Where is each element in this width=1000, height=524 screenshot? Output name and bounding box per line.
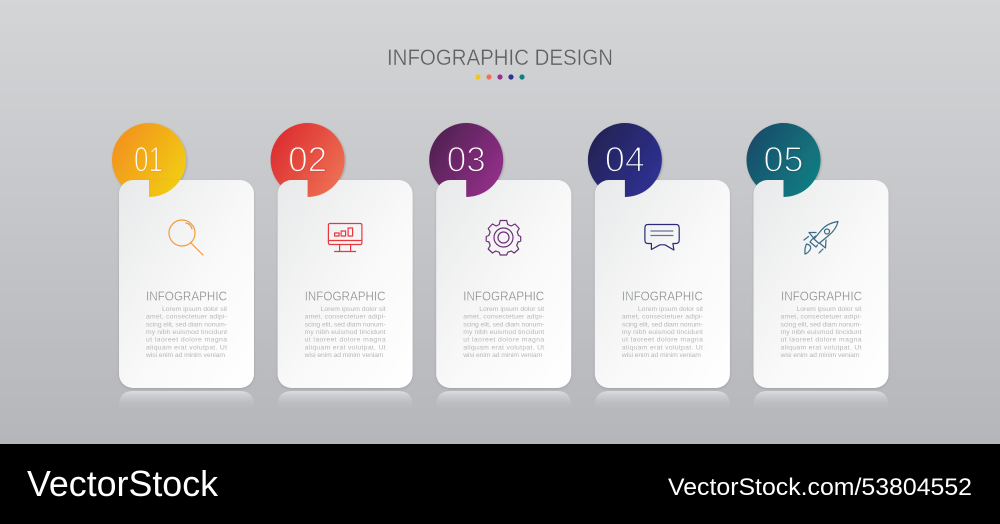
body text: wisi enim ad minim veniam	[621, 352, 701, 359]
icon: rocket	[804, 222, 838, 254]
body text: scing elit, sed diam nonum-	[146, 322, 227, 328]
body text: aliquam erat volutpat. Ut	[305, 344, 386, 352]
heading: INFOGRAPHIC	[146, 290, 227, 304]
icon: monitor	[328, 224, 362, 252]
body text: wisi enim ad minim veniam	[780, 352, 860, 359]
circle notch	[784, 180, 815, 197]
body text	[462, 306, 544, 359]
number circle	[429, 123, 503, 197]
body text: scing elit, sed diam nonum-	[463, 322, 544, 328]
body text: aliquam erat volutpat. Ut	[146, 344, 227, 352]
body text: ut laoreet dolore magna	[146, 336, 227, 344]
circle notch	[624, 180, 656, 197]
body text: my nibh euismod tincidunt	[780, 329, 862, 336]
body text	[304, 306, 386, 359]
heading: INFOGRAPHIC	[305, 290, 386, 304]
circle notch	[149, 180, 180, 197]
card	[119, 180, 254, 388]
number: 03	[447, 140, 486, 179]
body text: amet, consectetuer adipi-	[463, 314, 544, 320]
panel: step 02	[271, 123, 413, 410]
number: 01	[134, 140, 163, 179]
panel: step 05	[746, 123, 888, 410]
card	[436, 180, 571, 388]
body text: Lorem ipsum dolor sit	[638, 306, 703, 313]
number: 05	[764, 140, 804, 179]
circle notch	[308, 180, 339, 197]
panel: step 01	[112, 123, 254, 410]
body text	[780, 306, 862, 359]
body text: my nibh euismod tincidunt	[622, 329, 703, 336]
body text	[621, 306, 703, 359]
body text: Lorem ipsum dolor sit	[321, 306, 386, 313]
card	[278, 180, 413, 388]
reflection	[436, 391, 571, 410]
title dots	[475, 74, 525, 80]
heading: INFOGRAPHIC	[781, 290, 862, 304]
number circle	[746, 123, 820, 197]
panel: step 04	[588, 123, 730, 410]
body text: wisi enim ad minim veniam	[304, 352, 384, 359]
card	[754, 180, 888, 388]
body text: ut laoreet dolore magna	[622, 336, 703, 344]
body text: amet, consectetuer adipi-	[622, 314, 703, 320]
body text: Lorem ipsum dolor sit	[796, 306, 862, 313]
card	[595, 180, 730, 388]
number: 02	[288, 140, 327, 179]
icon: chat bubble	[645, 224, 679, 250]
reflection	[595, 391, 730, 410]
title: INFOGRAPHIC DESIGN	[387, 45, 613, 70]
footer image id: VectorStock.com/53804552	[668, 474, 972, 501]
body text: wisi enim ad minim veniam	[145, 352, 225, 359]
body text: amet, consectetuer adipi-	[305, 314, 386, 320]
body text: aliquam erat volutpat. Ut	[780, 344, 862, 352]
number circle	[271, 123, 345, 197]
panel: step 03	[429, 123, 571, 410]
body text: my nibh euismod tincidunt	[305, 329, 386, 336]
body text	[145, 306, 227, 359]
body text: wisi enim ad minim veniam	[462, 352, 543, 359]
body text: aliquam erat volutpat. Ut	[622, 344, 703, 352]
reflection	[278, 391, 413, 410]
number circle	[588, 123, 662, 197]
body text: scing elit, sed diam nonum-	[305, 322, 386, 328]
reflection	[754, 391, 888, 410]
heading: INFOGRAPHIC	[463, 290, 544, 304]
footer logo: VectorStock	[27, 463, 219, 504]
reflection	[119, 391, 254, 410]
heading: INFOGRAPHIC	[622, 290, 703, 304]
footer bar	[0, 444, 1000, 524]
body text: scing elit, sed diam nonum-	[780, 322, 862, 328]
body text: my nibh euismod tincidunt	[146, 329, 227, 336]
number: 04	[605, 140, 645, 179]
body text: Lorem ipsum dolor sit	[162, 306, 227, 313]
circle notch	[466, 180, 498, 197]
body text: Lorem ipsum dolor sit	[479, 306, 544, 313]
body text: aliquam erat volutpat. Ut	[463, 344, 544, 352]
body text: scing elit, sed diam nonum-	[622, 322, 703, 328]
body text: amet, consectetuer adipi-	[146, 314, 227, 320]
body text: my nibh euismod tincidunt	[463, 329, 544, 336]
body text: amet, consectetuer adipi-	[780, 314, 862, 320]
icon: gear	[486, 220, 521, 255]
number circle	[112, 123, 186, 197]
body text: ut laoreet dolore magna	[305, 336, 386, 344]
body text: ut laoreet dolore magna	[463, 336, 544, 344]
icon: magnifier	[169, 220, 203, 255]
body text: ut laoreet dolore magna	[780, 336, 862, 344]
